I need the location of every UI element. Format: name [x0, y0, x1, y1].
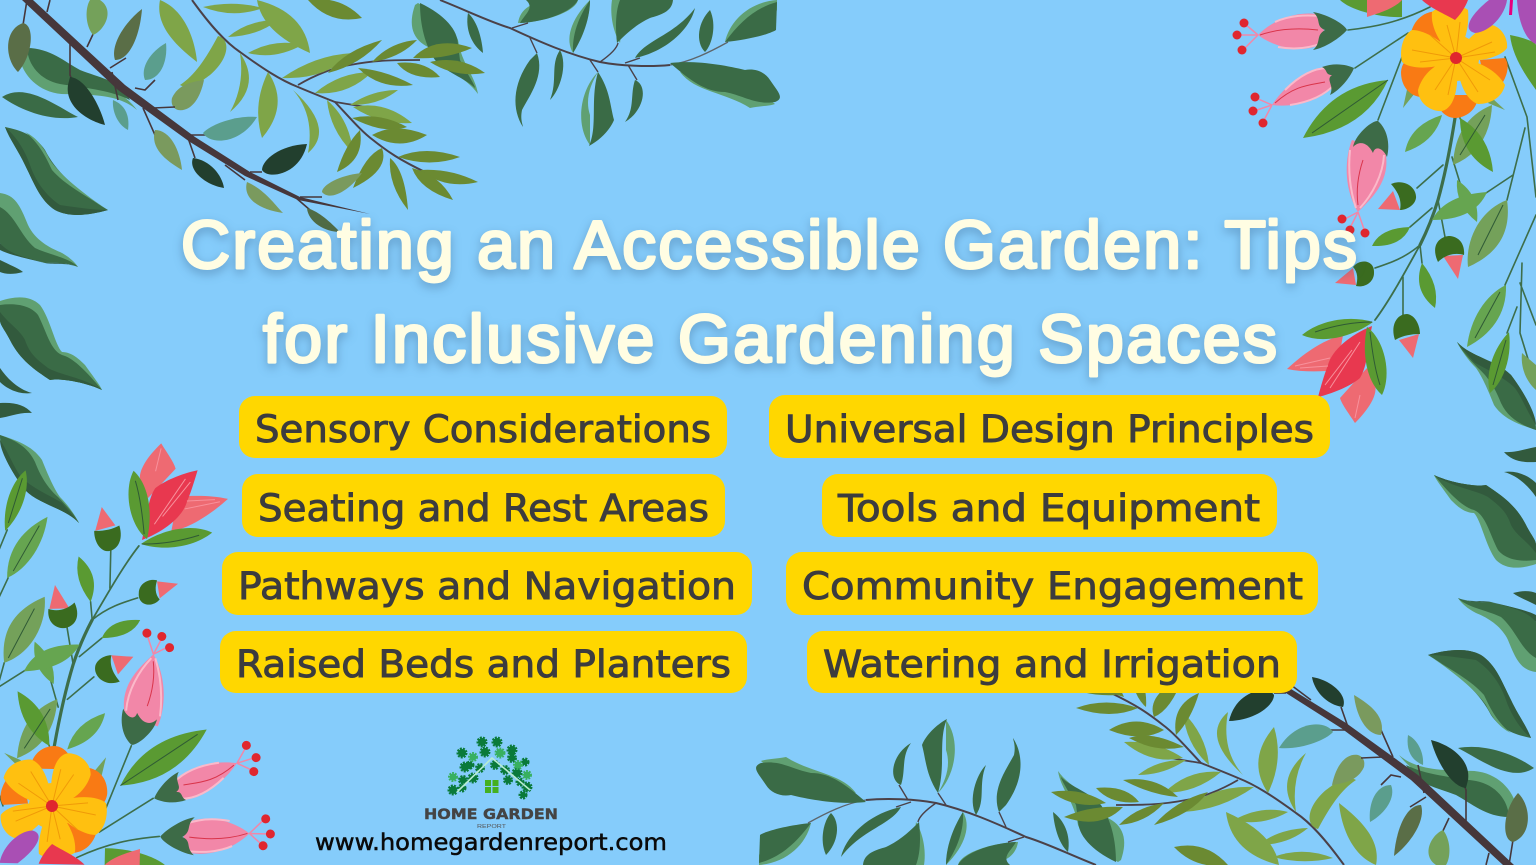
pill: Sensory Considerations: Sensory Considerations [255, 408, 711, 451]
pill: Tools and Equipment [822, 474, 1277, 537]
pill: Pathways and Navigation [222, 552, 752, 615]
pill: Tools and Equipment: Tools and Equipment [837, 487, 1260, 530]
title [181, 207, 1357, 377]
floral cluster: bottom left [0, 439, 284, 865]
pill: Seating and Rest Areas [242, 474, 725, 537]
pill: Universal Design Principles [769, 395, 1330, 458]
pill: Seating and Rest Areas: Seating and Rest Areas [258, 487, 709, 530]
pill: Watering and Irrigation: Watering and Irrigation [823, 643, 1281, 686]
pill: Raised Beds and Planters: Raised Beds and Planters [236, 643, 731, 686]
brand name: HOME GARDEN [424, 807, 558, 823]
pill: Raised Beds and Planters [220, 631, 747, 693]
brand name [424, 807, 558, 830]
brand name: REPORT [477, 824, 506, 830]
logo: house with flowers [449, 738, 531, 798]
pill: Pathways and Navigation: Pathways and Navigation [238, 565, 736, 608]
pill: Community Engagement [786, 552, 1318, 615]
website url: www.homegardenreport.com [315, 828, 667, 856]
pill: Universal Design Principles: Universal Design Principles [785, 408, 1314, 451]
pill: Sensory Considerations [239, 396, 727, 458]
title: for Inclusive Gardening Spaces [263, 301, 1277, 377]
foliage: top left branches and side leaves [0, 0, 780, 523]
pill: Watering and Irrigation [807, 631, 1297, 693]
floral cluster: top right [1232, 0, 1536, 423]
title: Creating an Accessible Garden: Tips [181, 207, 1357, 283]
pill: Community Engagement: Community Engagement [802, 565, 1303, 608]
foliage: bottom right branches and side leaves [756, 342, 1536, 865]
